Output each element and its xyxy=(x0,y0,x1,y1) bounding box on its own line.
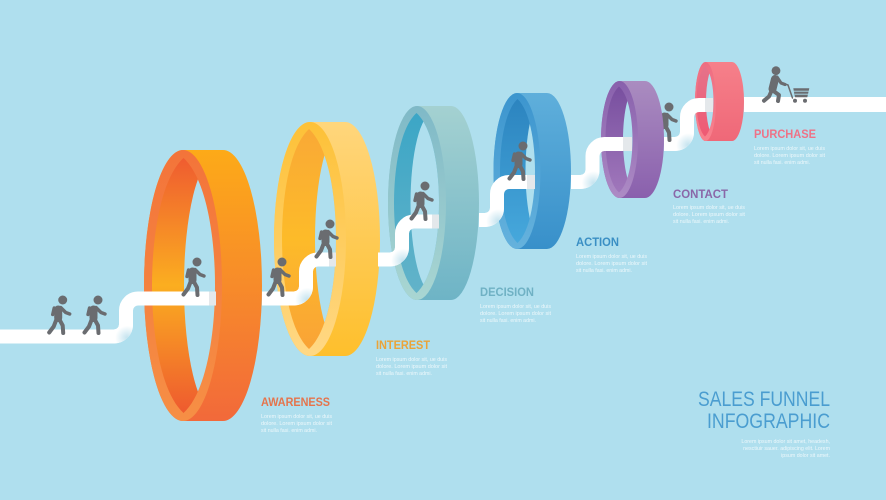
label: action xyxy=(576,235,648,274)
label: decision: sit nulla fasi. enim admi. xyxy=(480,318,536,324)
title description: Lorem ipsum dolor sit amet, headesh, xyxy=(741,439,830,445)
label: action: Lorem ipsum dolor sit, ue duis xyxy=(576,254,647,260)
road: decision to action xyxy=(479,175,535,220)
label: purchase: dolore. Lorem ipsum dolor sit xyxy=(754,153,826,159)
label: awareness: sit nulla fasi. enim admi. xyxy=(261,428,317,434)
label: interest xyxy=(376,338,448,377)
figure: person inside interest ring xyxy=(316,220,337,257)
figure: person before interest ring xyxy=(268,258,289,295)
figure: person inside action ring xyxy=(510,142,530,179)
title description: nesctiuir sauer. adipiscing elit. Lorem xyxy=(743,446,831,452)
title xyxy=(698,388,830,433)
figure: person inside decision ring xyxy=(412,182,432,219)
label: interest: sit nulla fasi. enim admi. xyxy=(376,371,432,377)
label: purchase: Lorem ipsum dolor sit, ue duis xyxy=(754,146,825,152)
figure: person pushing shopping cart xyxy=(764,66,809,103)
label: contact: sit nulla fasi. enim admi. xyxy=(673,219,729,225)
label: decision: Lorem ipsum dolor sit, ue duis xyxy=(480,304,551,310)
funnel ring: decision xyxy=(388,106,479,300)
label: action: sit nulla fasi. enim admi. xyxy=(576,268,632,274)
label: decision: DECISION xyxy=(480,285,534,299)
label: purchase: PURCHASE xyxy=(754,127,816,141)
figure: person leaving contact ring xyxy=(656,102,676,140)
road: interest to decision xyxy=(378,214,439,260)
label: interest: dolore. Lorem ipsum dolor sit xyxy=(376,364,448,370)
funnel ring: action xyxy=(494,93,571,249)
label: purchase: sit nulla fasi. enim admi. xyxy=(754,160,810,166)
label: contact xyxy=(673,187,746,225)
funnel ring: contact xyxy=(601,81,664,198)
label: action: dolore. Lorem ipsum dolor sit xyxy=(576,261,648,267)
label: purchase xyxy=(754,127,826,166)
label: decision: dolore. Lorem ipsum dolor sit xyxy=(480,311,552,317)
label: awareness: Lorem ipsum dolor sit, ue duis xyxy=(261,414,332,420)
funnel ring: awareness xyxy=(144,150,262,421)
label: awareness: AWARENESS xyxy=(261,395,330,409)
label: contact: Lorem ipsum dolor sit, ue duis xyxy=(673,205,745,211)
road: action to contact xyxy=(571,137,632,182)
funnel ring: purchase xyxy=(695,62,744,141)
figure: person walking on entry road xyxy=(49,296,70,333)
road: entry and first step into awareness ring xyxy=(0,292,216,336)
label: action: ACTION xyxy=(576,235,619,249)
title description: ipsum dolor sit amet. xyxy=(781,453,830,459)
label: interest: Lorem ipsum dolor sit, ue duis xyxy=(376,357,447,363)
figure: second person on entry road xyxy=(84,296,105,333)
road: awareness to interest xyxy=(262,252,336,298)
label: awareness xyxy=(261,395,333,434)
road: contact to purchase xyxy=(664,98,713,144)
figure: person inside awareness ring xyxy=(184,258,204,295)
title: SALES FUNNEL xyxy=(698,388,830,411)
label: awareness: dolore. Lorem ipsum dolor sit xyxy=(261,421,333,427)
title description xyxy=(741,439,831,459)
title: INFOGRAPHIC xyxy=(707,410,830,433)
funnel ring: interest xyxy=(274,122,380,356)
label: contact: CONTACT xyxy=(673,187,729,201)
label: interest: INTEREST xyxy=(376,338,431,352)
label: decision xyxy=(480,285,552,324)
road: exit after purchase ring xyxy=(744,97,886,112)
label: contact: dolore. Lorem ipsum dolor sit xyxy=(673,212,746,218)
